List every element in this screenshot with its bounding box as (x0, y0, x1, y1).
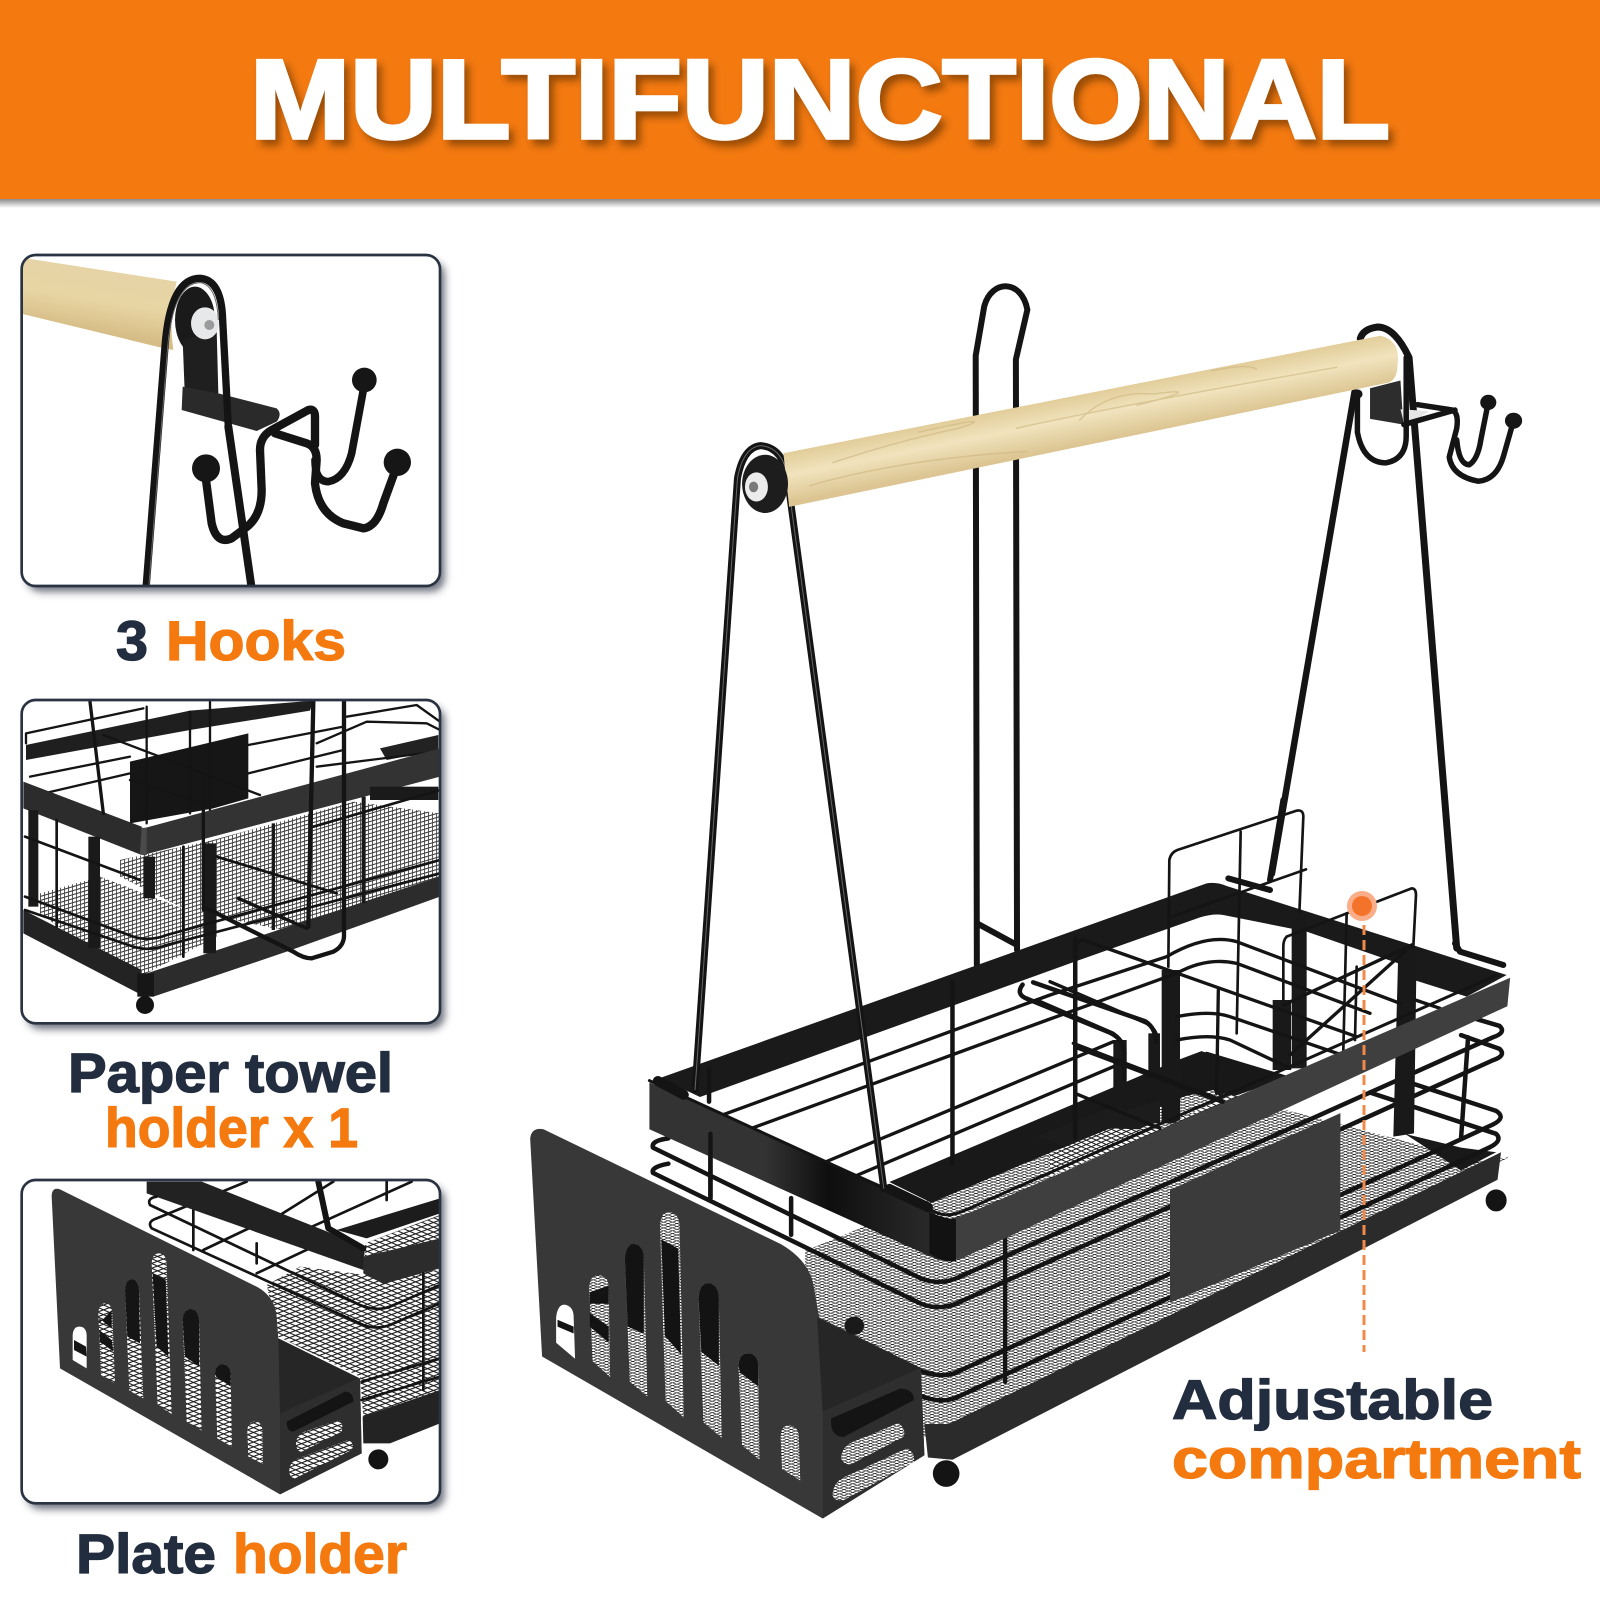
back band and plate (26, 701, 438, 823)
verticals and rails (653, 1014, 1502, 1400)
base band and foot (23, 877, 440, 1014)
label: Adjustable compartment (1172, 1368, 1581, 1490)
frame left band (649, 1082, 939, 1260)
title: MULTIFUNCTIONAL (250, 37, 1390, 162)
rails (149, 1197, 440, 1400)
cross wires (157, 1180, 412, 1273)
upper basket frame (649, 939, 1510, 1262)
label: Paper towel holder x 1 (68, 1041, 393, 1159)
lower rails (25, 790, 440, 957)
label: Adjustable compartment: Adjustable (1172, 1368, 1493, 1431)
mesh floor (805, 1088, 1510, 1437)
black plate on wall (1170, 1113, 1340, 1303)
frame right wires and legs (695, 327, 1522, 1189)
base and foot (363, 1390, 440, 1469)
posts (28, 787, 438, 953)
face slots (287, 1392, 353, 1432)
panel: 3 hooks (20, 255, 440, 588)
label: Plate holder (76, 1522, 407, 1585)
callout: marker dot and dashed leader (1347, 891, 1377, 1352)
label: Plate holder: holder (233, 1522, 407, 1585)
hooks (192, 368, 411, 540)
plate holder (530, 1129, 924, 1519)
wires (717, 939, 1440, 1177)
interior wall (889, 1051, 1244, 1203)
panel: paper towel holder (22, 700, 440, 1023)
bracket (1370, 381, 1403, 425)
wire frame behind (228, 427, 252, 588)
frame band (147, 1182, 440, 1284)
right hooks (1352, 358, 1522, 481)
label: Paper towel holder x 1: Paper towel (68, 1041, 393, 1104)
right A-frame outer leg (1360, 327, 1457, 948)
top rails (709, 939, 1223, 1198)
wire frame (146, 278, 228, 588)
disc and bracket (175, 287, 280, 431)
feet (933, 1189, 1507, 1487)
divider C (1283, 888, 1416, 1050)
label: 3 Hooks: Hooks (166, 609, 346, 672)
lower basket (653, 1014, 1510, 1487)
back band (660, 883, 1507, 1097)
right handle foot (1455, 943, 1503, 965)
divider A (1168, 810, 1306, 1033)
mesh (267, 1267, 440, 1417)
label: 3 Hooks: 3 (116, 609, 148, 672)
main product: caddy (530, 286, 1522, 1519)
paper towel wire (207, 702, 344, 958)
base band (924, 1152, 1501, 1460)
plate holder body (52, 1189, 362, 1494)
corner post (929, 1212, 956, 1262)
wooden bar end (20, 257, 177, 350)
face slots (831, 1389, 914, 1437)
plate holder slots (73, 1253, 263, 1464)
bolt disc (742, 455, 788, 513)
frame right band (938, 978, 1510, 1261)
wooden bar (783, 336, 1398, 507)
upper rails (26, 702, 440, 823)
inner plate (1180, 1052, 1290, 1100)
frame band (23, 748, 440, 855)
plate holder slots (556, 1212, 800, 1480)
posts (1113, 915, 1417, 1137)
panel: plate holder (22, 1180, 440, 1503)
mesh floor (213, 802, 440, 930)
header banner (0, 0, 1600, 208)
upper basket interior (660, 800, 1507, 1177)
label: Paper towel holder x 1: holder x 1 (105, 1096, 358, 1159)
paper towel holder wire and inner leg (976, 286, 1355, 965)
left A-frame (695, 446, 884, 1189)
end caps (658, 1081, 928, 1207)
label: Adjustable compartment: compartment (1172, 1427, 1581, 1490)
handle foot back (1228, 878, 1270, 890)
label: Plate holder: Plate (76, 1522, 216, 1585)
